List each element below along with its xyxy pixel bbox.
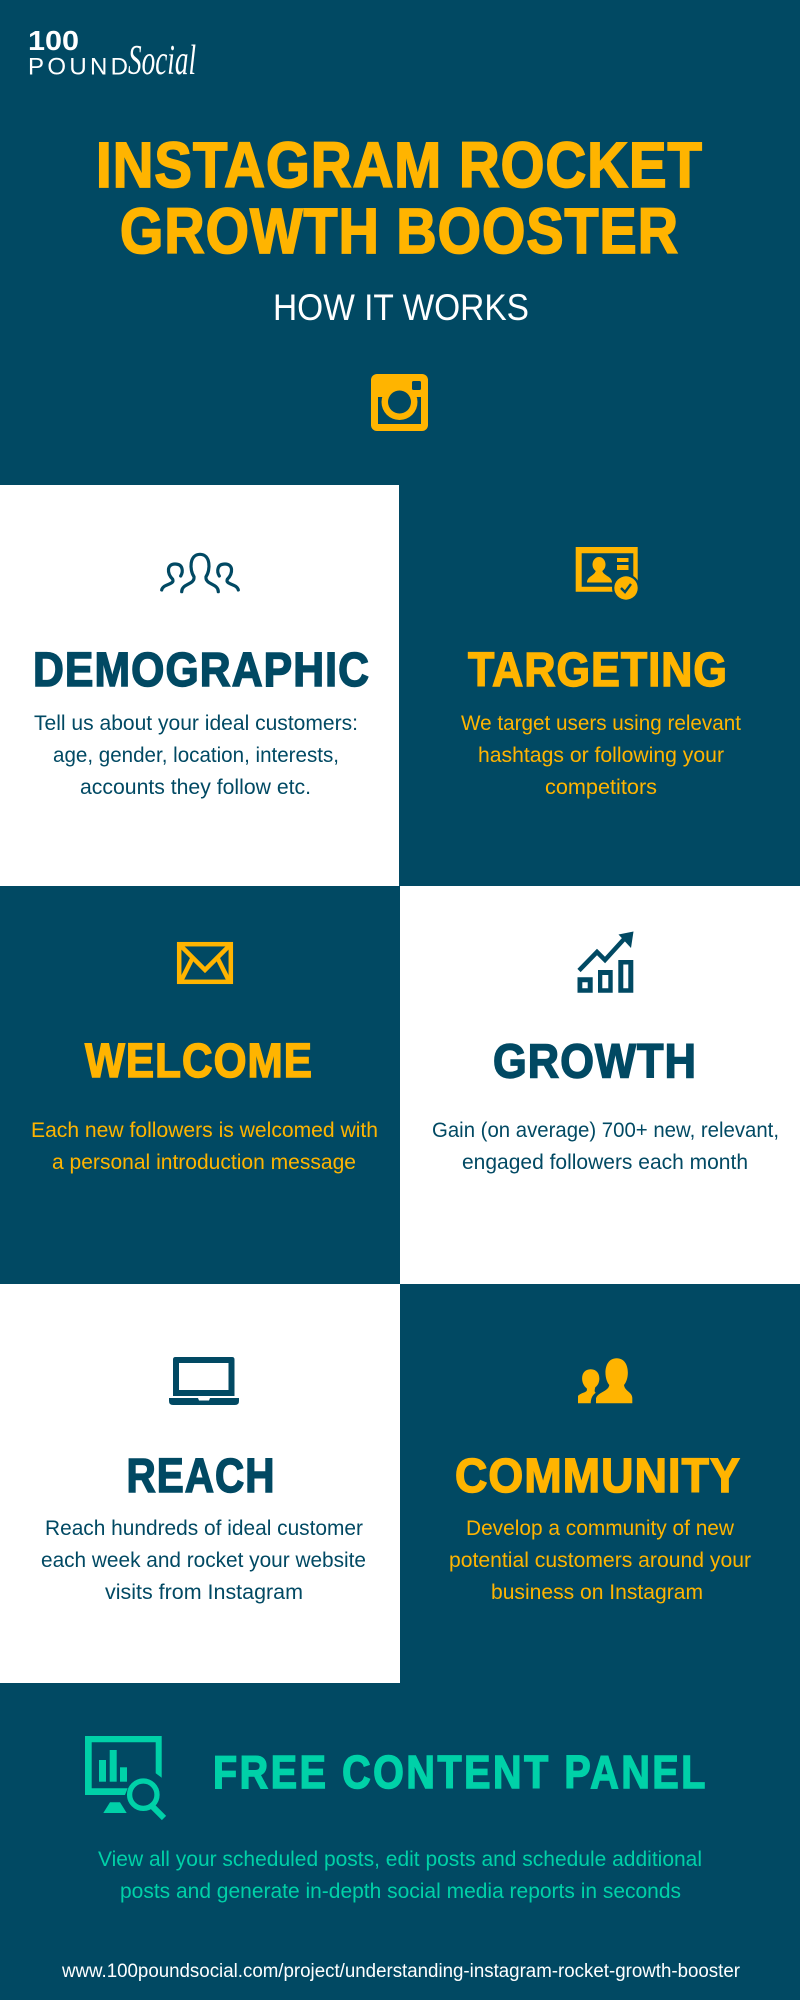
icon: laptop bbox=[169, 1357, 239, 1405]
text: free content panel description: posts and generate in-depth social media reports in seconds bbox=[120, 1878, 681, 1903]
title: INSTAGRAM ROCKET bbox=[96, 129, 703, 201]
heading: reach: REACH bbox=[126, 1450, 276, 1503]
icon: id card with check bbox=[576, 547, 640, 602]
panel: community bbox=[449, 1358, 751, 1604]
text: welcome description bbox=[31, 1117, 378, 1174]
heading: community: COMMUNITY bbox=[455, 1450, 741, 1503]
text: community description bbox=[449, 1515, 751, 1604]
logo: 100 Pound Social: POUND bbox=[28, 54, 128, 80]
panel: free content panel bbox=[85, 1736, 708, 1903]
text: community description: business on Instagram bbox=[491, 1579, 703, 1604]
title: GROWTH BOOSTER bbox=[120, 195, 679, 267]
panel: growth bbox=[400, 886, 800, 1284]
text: demographic description bbox=[34, 710, 358, 799]
icon: group of people bbox=[162, 554, 238, 592]
text: free content panel description: View all your scheduled posts, edit posts and schedule additional bbox=[98, 1846, 702, 1871]
panel: header bbox=[28, 25, 703, 431]
icon: two people bbox=[578, 1358, 632, 1403]
text: welcome description: Each new followers is welcomed with bbox=[31, 1117, 378, 1142]
heading: welcome: WELCOME bbox=[85, 1035, 313, 1088]
logo: 100 Pound Social: 100 bbox=[28, 25, 79, 56]
text: demographic description: Tell us about your ideal customers: bbox=[34, 710, 358, 735]
text: community description: potential customers around your bbox=[449, 1547, 751, 1572]
title bbox=[96, 129, 703, 267]
text: reach description bbox=[41, 1515, 366, 1604]
text: growth description: Gain (on average) 700+ new, relevant, bbox=[432, 1117, 779, 1142]
icon: envelope bbox=[179, 944, 231, 982]
text: targeting description: hashtags or following your bbox=[478, 742, 724, 767]
logo: 100 Pound Social: Social bbox=[128, 38, 196, 84]
heading: targeting: TARGETING bbox=[468, 644, 728, 697]
text: reach description: visits from Instagram bbox=[105, 1579, 303, 1604]
text: community description: Develop a community of new bbox=[466, 1515, 734, 1540]
panel: welcome bbox=[31, 944, 378, 1174]
text: growth description: engaged followers each month bbox=[462, 1149, 748, 1174]
text: targeting description: competitors bbox=[545, 774, 657, 799]
panel: demographic bbox=[0, 485, 399, 886]
icon: growth chart bbox=[578, 932, 634, 993]
logo: 100 Pound Social bbox=[28, 25, 196, 84]
text: targeting description bbox=[461, 710, 741, 799]
text: growth description bbox=[432, 1117, 779, 1174]
text: demographic description: accounts they follow etc. bbox=[80, 774, 311, 799]
text: free content panel description bbox=[98, 1846, 702, 1903]
heading: free content panel: FREE CONTENT PANEL bbox=[213, 1746, 708, 1798]
text: reach description: each week and rocket your website bbox=[41, 1547, 366, 1572]
panel: targeting bbox=[461, 547, 741, 799]
text: demographic description: age, gender, location, interests, bbox=[53, 742, 339, 767]
text: welcome description: a personal introduction message bbox=[52, 1149, 356, 1174]
subtitle: HOW IT WORKS bbox=[273, 287, 529, 328]
text: reach description: Reach hundreds of ideal customer bbox=[45, 1515, 363, 1540]
text: targeting description: We target users using relevant bbox=[461, 710, 741, 735]
heading: growth: GROWTH bbox=[493, 1036, 697, 1088]
icon: dashboard with magnifier bbox=[85, 1736, 164, 1818]
panel: reach bbox=[0, 1284, 400, 1683]
icon: instagram bbox=[371, 374, 428, 431]
heading: demographic: DEMOGRAPHIC bbox=[33, 644, 370, 697]
footer url: www.100poundsocial.com/project/understanding-instagram-rocket-growth-booster bbox=[61, 1961, 741, 1982]
